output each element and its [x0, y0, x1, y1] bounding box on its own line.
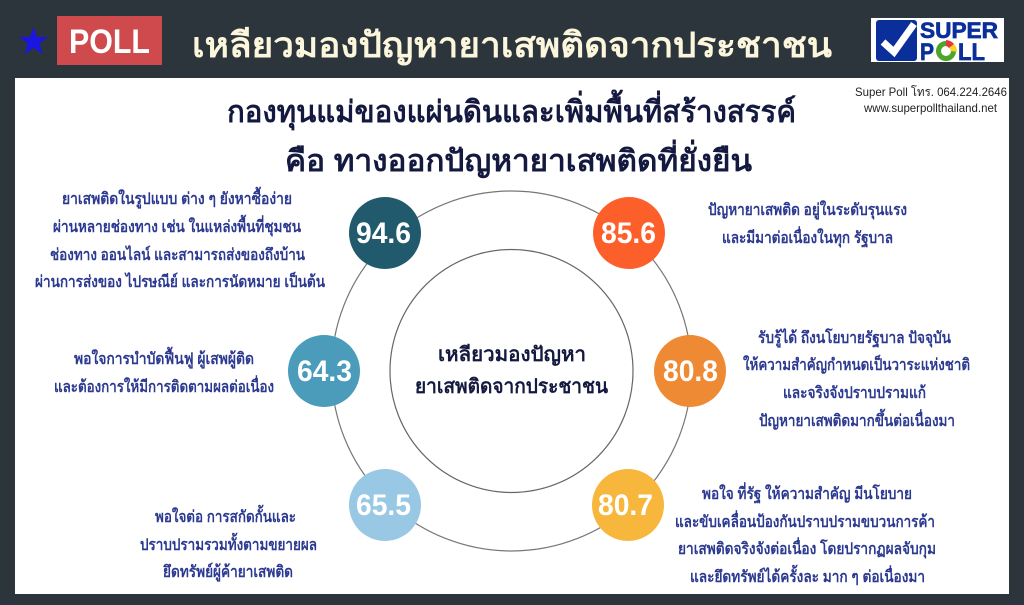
center label: เหลียวมองปัญหา: [438, 343, 586, 366]
value 80.8: 80.8: [663, 355, 718, 388]
text block: 80.8: ให้ความสำคัญกำหนดเป็นวาระแห่งชาติ: [743, 353, 970, 375]
value 80.7: [592, 469, 664, 541]
text block: 94.6: ยาเสพติดในรูปแบบ ต่าง ๆ ยังหาซื้อง่าย: [62, 186, 292, 210]
value 64.3: [288, 335, 360, 407]
value 65.5: 65.5: [356, 489, 411, 522]
main heading: คือ ทางออกปัญหายาเสพติดที่ยั่งยืน: [285, 139, 753, 179]
value 65.5: [349, 469, 421, 541]
poll badge: [57, 16, 162, 65]
logo: LL: [958, 39, 985, 66]
text block: 80.7: และขับเคลื่อนป้องกันปราบปรามขบวนการค้า: [675, 510, 935, 531]
logo: [871, 18, 1004, 66]
poll badge: POLL: [69, 23, 150, 61]
header title: เหลียวมองปัญหายาเสพติดจากประชาชน: [192, 26, 832, 66]
value 94.6: 94.6: [356, 217, 411, 250]
text block: 64.3: และต้องการให้มีการติดตามผลต่อเนื่อง: [54, 375, 274, 396]
text block: 64.3: [54, 346, 274, 396]
logo: P: [920, 39, 934, 66]
outer ring: [332, 191, 692, 551]
center label: [415, 343, 608, 398]
value 64.3: 64.3: [297, 355, 352, 388]
text block: 65.5: ปราบปรามรวมทั้งตามขยายผล: [140, 532, 317, 554]
text block: 80.7: ยาเสพติดจริงจังต่อเนื่อง โดยปรากฏผลจับกุม: [678, 537, 936, 559]
text block: 94.6: ช่องทาง ออนไลน์ และสามารถส่งของถึงบ้าน: [50, 245, 305, 264]
text block: 80.8: [743, 327, 970, 431]
text block: 85.6: ปัญหายาเสพติด อยู่ในระดับรุนแรง: [708, 200, 907, 221]
text block: 85.6: [708, 200, 907, 248]
text block: 65.5: ยึดทรัพย์ผู้ค้ายาเสพติด: [162, 562, 293, 583]
text block: 80.8: ปัญหายาเสพติดมากขึ้นต่อเนื่องมา: [759, 408, 955, 431]
text block: 85.6: และมีมาต่อเนื่องในทุก รัฐบาล: [722, 226, 893, 248]
text block: 65.5: พอใจต่อ การสกัดกั้นและ: [155, 504, 296, 526]
main heading: [227, 89, 796, 179]
text block: 80.7: พอใจ ที่รัฐ ให้ความสำคัญ มีนโยบาย: [702, 482, 912, 504]
value 80.7: 80.7: [598, 489, 653, 522]
main heading: กองทุนแม่ของแผ่นดินและเพิ่มพื้นที่สร้างสรรค์: [227, 89, 796, 131]
text block: 64.3: พอใจการบำบัดฟื้นฟู ผู้เสพผู้ติด: [74, 346, 254, 370]
center label: ยาเสพติดจากประชาชน: [415, 376, 608, 398]
text block: 65.5: [140, 504, 317, 583]
contact text: www.superpollthailand.net: [863, 101, 998, 115]
icon: star: [19, 27, 48, 54]
text block: 80.7: [675, 482, 936, 586]
value 85.6: [593, 197, 665, 269]
value 85.6: 85.6: [601, 217, 656, 250]
contact text: Super Poll โทร. 064.224.2646: [855, 85, 1007, 99]
value 94.6: [349, 197, 421, 269]
text block: 80.8: รับรู้ได้ ถึงนโยบายรัฐบาล ปัจจุบัน: [758, 327, 951, 349]
text block: 80.8: และจริงจังปราบปรามแก้: [783, 384, 926, 402]
contact text: [855, 85, 1007, 115]
text block: 80.7: และยึดทรัพย์ได้ครั้งละ มาก ๆ ต่อเนื่องมา: [690, 564, 925, 586]
value 80.8: [654, 335, 726, 407]
text block: 94.6: [35, 186, 325, 291]
logo: SUPER: [920, 18, 998, 43]
inner ring: [390, 250, 633, 492]
text block: 94.6: ผ่านการส่งของ ไปรษณีย์ และการนัดหมาย เป็นต้น: [35, 270, 325, 291]
text block: 94.6: ผ่านหลายช่องทาง เช่น ในแหล่งพื้นที่ชุมชน: [53, 214, 301, 237]
